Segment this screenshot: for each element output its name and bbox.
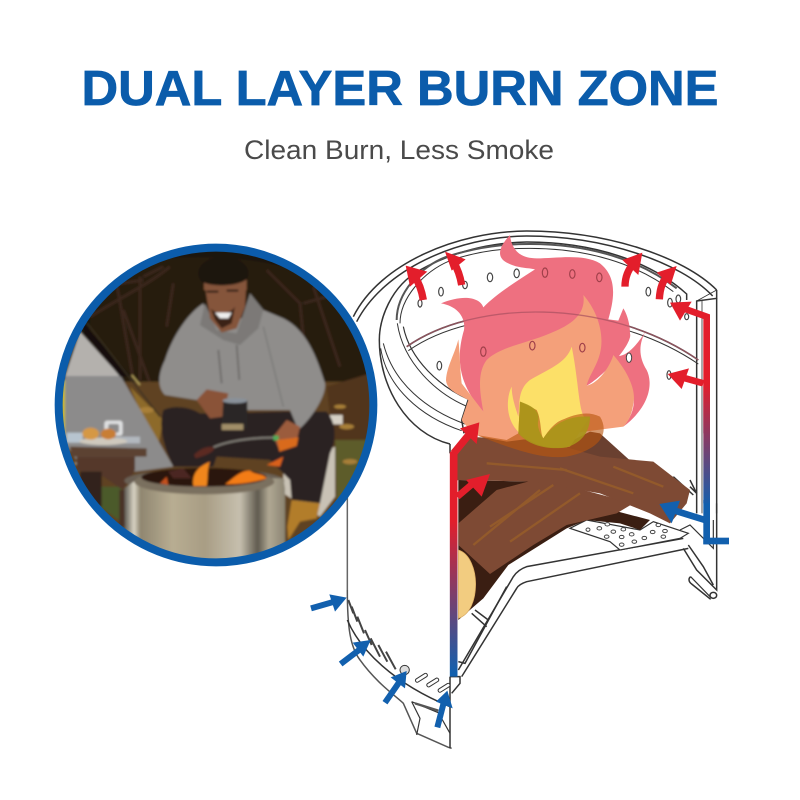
hot air arrows: top xyxy=(406,252,677,300)
perforated grate xyxy=(570,520,688,550)
photo: man at fire pit in circle xyxy=(50,240,380,568)
left channel red arrowheads xyxy=(454,422,490,497)
logs xyxy=(452,432,690,620)
title: DUAL LAYER BURN ZONE xyxy=(82,62,718,116)
outer body and rim lines xyxy=(353,231,717,513)
flames xyxy=(407,235,698,457)
photo ring xyxy=(59,248,373,562)
heat exchange holes xyxy=(418,269,689,379)
lower frame, feet, vents xyxy=(347,450,717,748)
subtitle: Clean Burn, Less Smoke xyxy=(244,135,554,165)
right pipe gradient section xyxy=(703,380,710,503)
photo scene xyxy=(62,264,370,558)
right air channel arrow xyxy=(668,302,707,433)
fire pit cutaway diagram xyxy=(311,231,729,748)
left air channel arrow xyxy=(442,452,465,677)
cool air arrows xyxy=(311,500,729,727)
